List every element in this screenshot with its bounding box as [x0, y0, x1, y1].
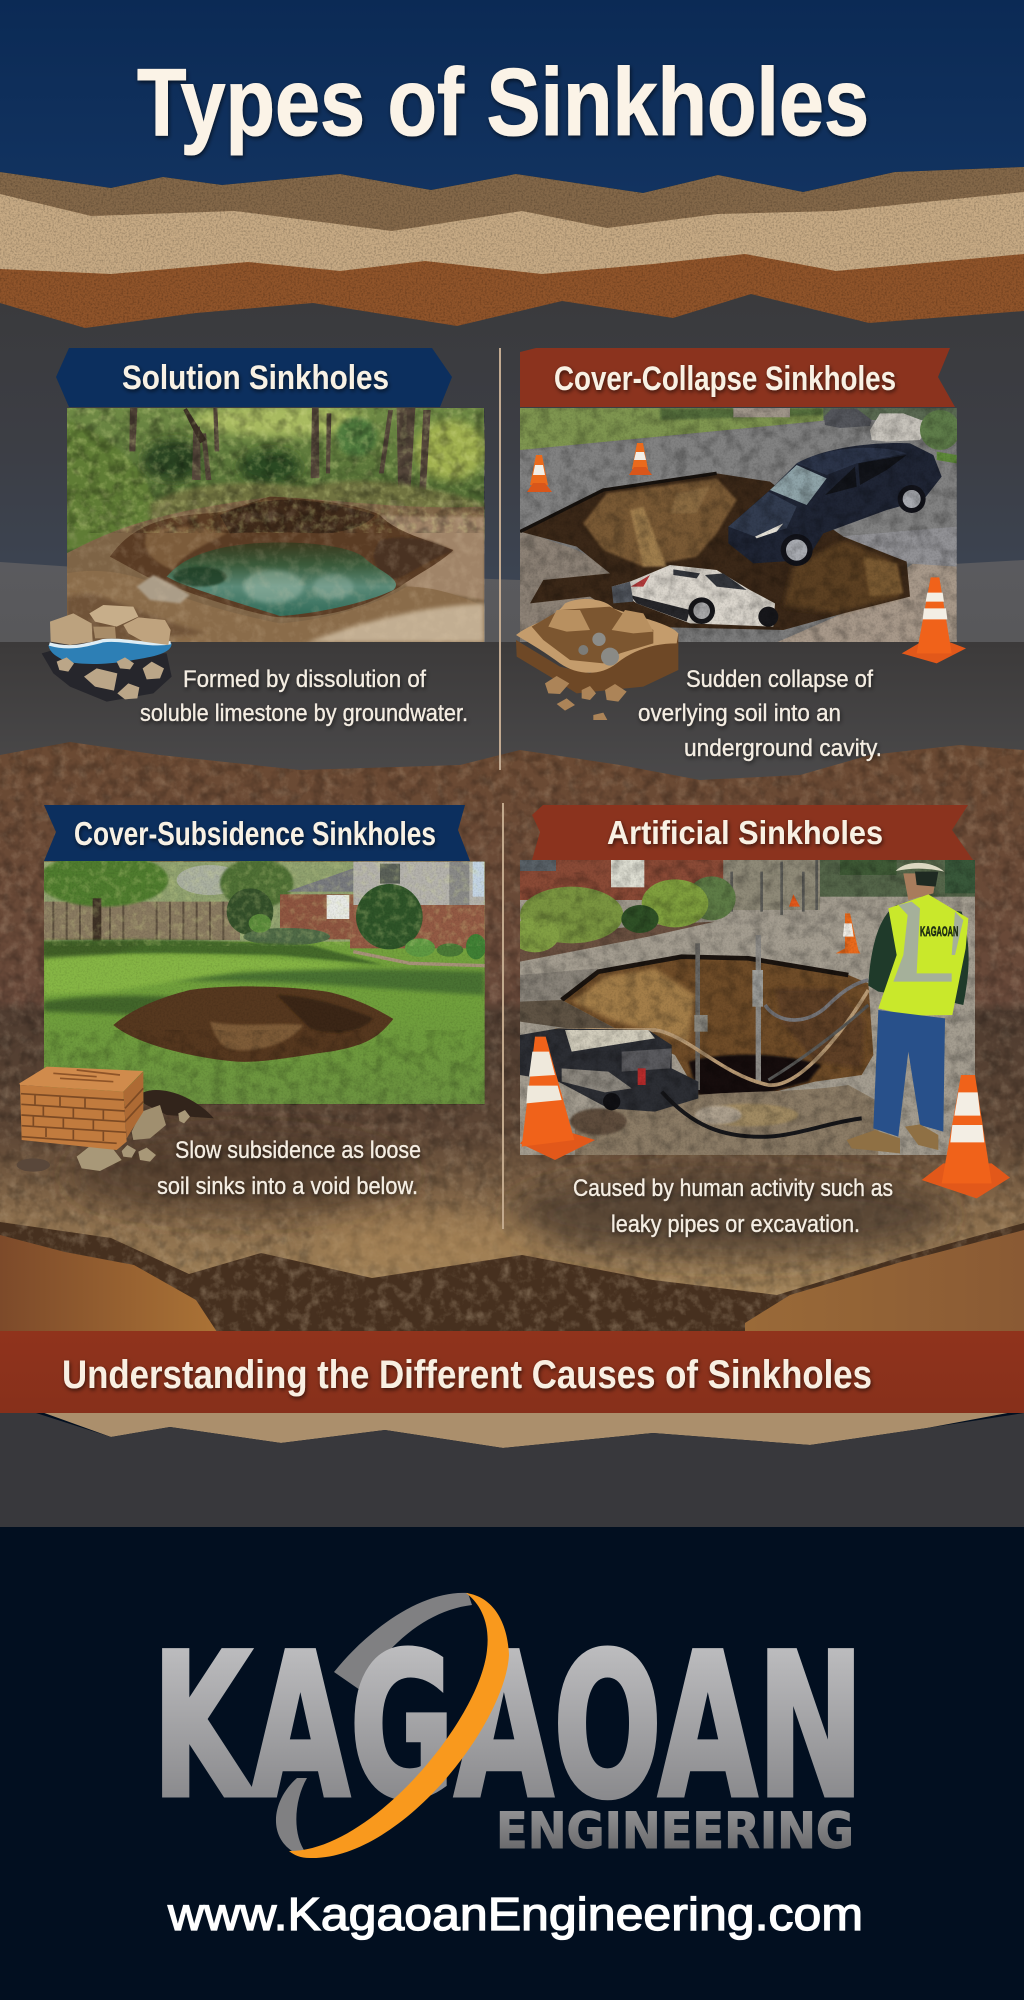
photo: lawn depression by house	[38, 853, 486, 1105]
logo ring: orange front arc	[289, 1593, 509, 1858]
heading ribbon: cover-subsidence	[44, 805, 470, 861]
panel: solution sinkholes	[42, 348, 487, 727]
description: artificial: Caused by human activity such as	[573, 1175, 893, 1202]
panel: artificial sinkholes	[511, 805, 1010, 1238]
heading ribbon: cover-collapse	[520, 348, 955, 407]
layer: tan sand	[0, 192, 1024, 280]
logo tagline: ENGINEERING	[496, 1802, 854, 1860]
description: artificial: leaky pipes or excavation.	[611, 1211, 860, 1238]
tan soil strip under banner	[36, 1410, 1024, 1448]
panel: cover-collapse sinkholes	[516, 348, 966, 762]
icon: brick wall and dirt	[17, 1067, 214, 1172]
background: grey road band	[0, 560, 1024, 645]
soil layer grain	[0, 165, 1024, 335]
description: solution: soluble limestone by groundwater.	[140, 700, 468, 727]
header panel	[0, 0, 1024, 193]
soil layers	[0, 167, 1024, 328]
layer: top brown soil	[0, 167, 1024, 238]
icon: soil block with rocks	[516, 599, 678, 720]
heading ribbon: cover-subsidence: Cover-Subsidence Sinkholes	[74, 815, 436, 852]
heading ribbon: artificial: Artificial Sinkholes	[607, 814, 883, 851]
photo: forest sinkhole with pond	[67, 403, 487, 642]
description: cover-subsidence	[157, 1137, 421, 1200]
description: cover-collapse: overlying soil into an	[638, 700, 841, 727]
description: cover-subsidence: Slow subsidence as loose	[175, 1137, 421, 1164]
icon: cone front right	[922, 1075, 1010, 1198]
logo ring: grey back arc	[276, 1593, 472, 1853]
photo: road collapse with cars	[520, 408, 960, 642]
background: brown soil section	[0, 742, 1024, 1340]
description: cover-subsidence: soil sinks into a void below.	[157, 1173, 418, 1200]
heading ribbon: cover-collapse: Cover-Collapse Sinkholes	[554, 360, 896, 398]
orange soil wedge right	[745, 1230, 1024, 1335]
soil texture	[0, 740, 1024, 1340]
description: cover-collapse: Sudden collapse of	[686, 666, 873, 693]
background: charcoal band	[0, 1413, 1024, 1530]
title: Types of Sinkholes	[137, 49, 869, 156]
background: footer navy	[0, 1527, 1024, 2000]
vertical divider top	[499, 348, 501, 770]
heading ribbon: solution: Solution Sinkholes	[122, 359, 389, 397]
description: cover-collapse: underground cavity.	[684, 735, 882, 762]
dark crack below soil	[0, 1222, 1024, 1340]
layer: rust clay	[0, 254, 1024, 328]
panel: cover-subsidence sinkholes	[17, 805, 486, 1200]
figure: worker in safety vest	[847, 863, 969, 1153]
background: dark underground section	[0, 290, 1024, 580]
heading ribbon: solution	[56, 348, 452, 407]
bottom banner	[0, 1331, 1024, 1413]
photo: excavation with worker	[511, 860, 975, 1155]
heading ribbon: artificial	[532, 805, 973, 860]
orange soil wedge left	[0, 1235, 219, 1335]
description: solution	[140, 666, 468, 727]
description: solution: Formed by dissolution of	[183, 666, 426, 693]
website url: www.KagaoanEngineering.com	[167, 1888, 863, 1940]
icon: large cone	[902, 577, 966, 663]
rubble in crack	[1, 1224, 1012, 1331]
description: cover-collapse	[638, 666, 882, 762]
banner text: Understanding the Different Causes of Sinkholes	[62, 1353, 872, 1397]
vertical divider bottom	[502, 803, 504, 1229]
logo: Kagaoan Engineering	[152, 1593, 864, 1860]
background: asphalt band	[0, 642, 1024, 792]
icon: rocks and water	[42, 605, 172, 702]
icon: cone front left	[520, 1037, 595, 1160]
small cones	[530, 455, 548, 485]
vest lettering: KAGAOAN	[920, 923, 958, 939]
description: artificial	[573, 1175, 893, 1238]
